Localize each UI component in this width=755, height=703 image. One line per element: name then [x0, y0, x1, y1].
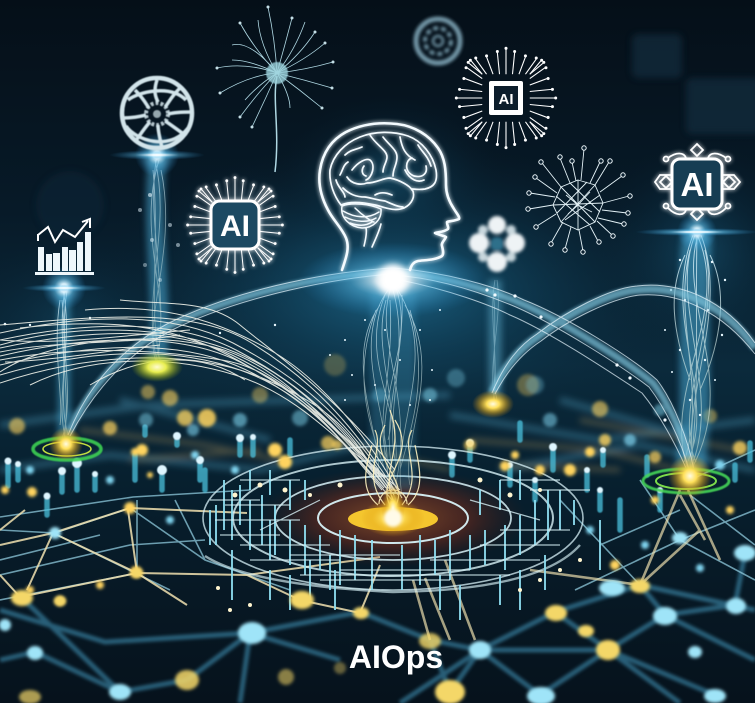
icon: AI chip top: AI — [498, 91, 514, 108]
stream particles — [4, 193, 726, 416]
stream: right chip — [674, 230, 721, 470]
cerebellum — [342, 204, 381, 228]
foreground network: blurred nodes and edges — [0, 450, 755, 703]
icon: node mesh sphere — [526, 146, 632, 254]
icon: AI chip right: AI — [680, 166, 714, 203]
central circuit rings — [203, 446, 600, 620]
central glowing core — [348, 484, 438, 537]
ground node: right green — [643, 454, 729, 498]
icon: neuron — [216, 6, 334, 172]
ground node: left green — [33, 427, 101, 461]
icon: brain in head profile — [319, 123, 459, 270]
ground node: amber center right — [472, 390, 514, 418]
icon: blurred ring top — [416, 19, 460, 63]
blue data pillars — [4, 423, 750, 530]
icon: circular maze — [122, 78, 192, 148]
brain stem — [364, 224, 381, 247]
arcing light bridges — [68, 268, 755, 470]
icon: bar chart with rising line — [35, 219, 94, 275]
icon: AI chip left — [186, 176, 284, 274]
ground node: yellow left — [131, 352, 183, 382]
icon: AI chip right — [655, 144, 740, 220]
head outline — [319, 123, 459, 270]
brain folds — [330, 132, 437, 210]
icon: blurred flower — [469, 216, 525, 272]
large foreground glowing nodes — [0, 527, 755, 703]
stream: circular icon — [151, 155, 166, 365]
white filament sweep to core — [0, 300, 402, 500]
blurred mid-ground bands — [0, 395, 755, 470]
blurred background icons — [36, 34, 755, 239]
stream: brain — [363, 285, 422, 500]
stream: flower — [493, 280, 498, 402]
small mid-ground data dots — [1, 354, 747, 606]
glow points under icons — [22, 133, 755, 318]
stream glow behind streams — [64, 160, 697, 490]
vertical data streams — [57, 155, 721, 500]
stream: left chart — [57, 290, 68, 440]
title: AIOps: AIOps — [349, 639, 443, 675]
icon: AI chip left: AI — [220, 210, 250, 243]
icon: AI chip top — [455, 47, 557, 149]
